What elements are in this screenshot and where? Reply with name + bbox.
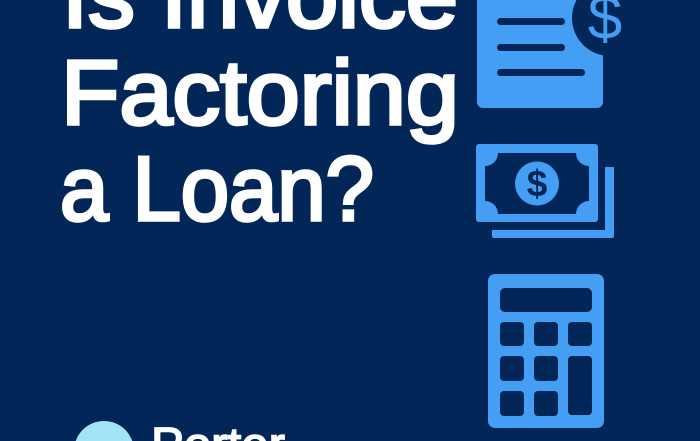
icon: stacked banknotes: $ [527,163,548,204]
logo [74,419,285,441]
infographic canvas [62,0,622,441]
icon: stacked banknotes [476,144,614,238]
title: a Loan? [60,139,374,240]
icon: invoice document with dollar badge [477,0,622,108]
icon: calculator [488,274,604,428]
title [60,0,459,240]
title: Factoring [61,43,459,144]
